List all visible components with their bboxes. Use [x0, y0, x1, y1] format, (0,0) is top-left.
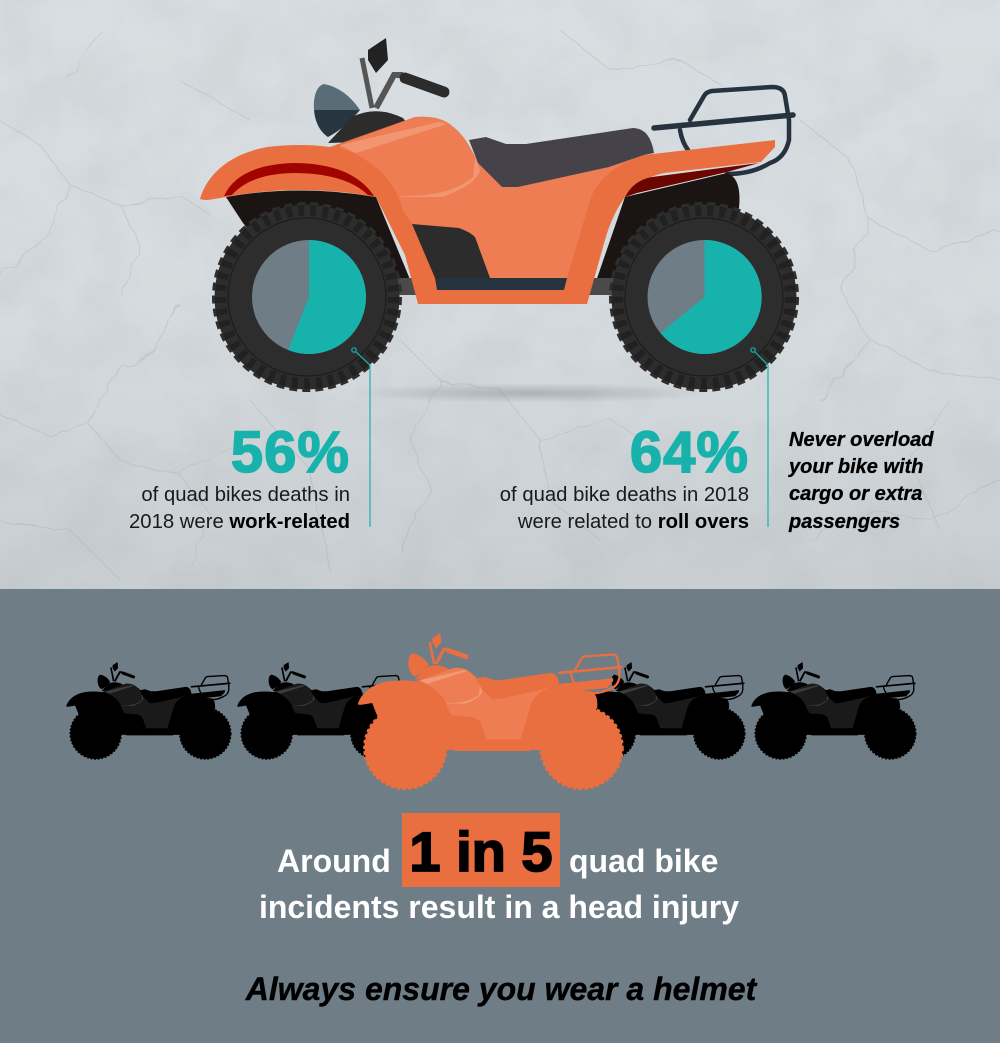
- highlight box: 1 in 5: 1 in 5: [409, 820, 553, 883]
- silhouette 3: highlighted orange quad: [358, 633, 622, 789]
- body highlights: [340, 122, 480, 197]
- silhouette 4: [580, 662, 745, 759]
- ground shadow: [345, 383, 715, 403]
- body light panel: [340, 117, 644, 278]
- panel: grey lower section: [0, 589, 1000, 1043]
- silhouette 5: [751, 662, 916, 759]
- warning: never overload: [788, 429, 934, 533]
- warning: always wear a helmet: Always ensure you wear a helmet: [246, 971, 756, 1007]
- warning: never overload: cargo or extra: [789, 483, 922, 505]
- leader line: left: [352, 348, 370, 527]
- headlight: [314, 84, 360, 137]
- headline: around 1 in 5: Around: [277, 843, 391, 879]
- stat: 56% description: [129, 484, 350, 533]
- row of quad bike silhouettes: [66, 633, 916, 790]
- stat: 64% description: [500, 484, 749, 533]
- warning: never overload: passengers: [789, 511, 900, 533]
- rear underbody: [593, 173, 740, 290]
- silhouette 2: [237, 662, 402, 759]
- pie: 36% other: [648, 240, 762, 354]
- cowl: [328, 111, 420, 143]
- front fender red liner: [224, 163, 374, 196]
- footboard: [435, 278, 567, 290]
- pie: 56% work-related: [288, 240, 366, 354]
- rear fender red liner: [625, 163, 759, 197]
- seat: [469, 128, 654, 187]
- warning: never overload: your bike with: [789, 456, 923, 478]
- left wheel with 56% pie: [214, 204, 400, 390]
- stat: 64% description: of quad bike deaths in 2018: [500, 484, 749, 506]
- handlebars and mirror: [362, 38, 444, 108]
- stat: 56% description: 2018 were work-related: [129, 511, 350, 533]
- headline: incidents result in a head injury: incidents result in a head injury: [259, 889, 739, 925]
- front underbody: [226, 190, 409, 290]
- stat: 64% description: were related to roll overs: [518, 511, 749, 533]
- headline: quad bike: quad bike: [569, 843, 718, 879]
- cargo rack: [654, 87, 793, 174]
- footrest bar: [395, 278, 615, 295]
- stat: 64% value: 64%: [630, 420, 749, 485]
- leader line: right: [751, 348, 768, 527]
- warning: never overload: Never overload: [789, 429, 934, 451]
- dark side panel: [412, 224, 490, 278]
- background: cracked ground panel: [0, 0, 1000, 589]
- pie: 64% roll overs: [660, 240, 762, 354]
- right wheel with 64% pie: [610, 204, 798, 390]
- body shell and fenders: [200, 117, 775, 304]
- silhouette 1: [66, 662, 231, 759]
- stat: 56% value: 56%: [231, 420, 350, 485]
- stat: 56% description: of quad bikes deaths in: [141, 484, 350, 506]
- pie: 44% other: [252, 240, 366, 354]
- illustration: orange quad bike with pie-chart wheels: [200, 38, 799, 527]
